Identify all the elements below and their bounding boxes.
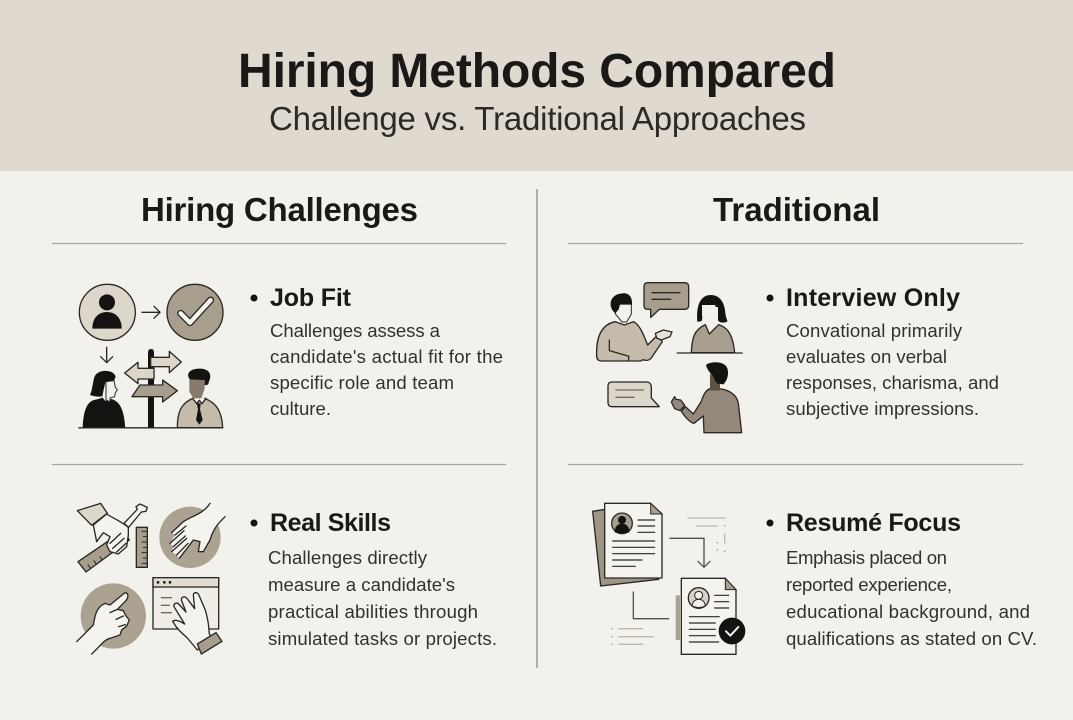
panel: traditional <box>593 191 1037 654</box>
text: interview only: subjective impressions. <box>786 398 979 419</box>
text: interview only: responses, charisma, and <box>786 372 999 393</box>
text: real skills: measure a candidate's <box>268 574 455 595</box>
text: real skills: simulated tasks or projects. <box>268 628 497 649</box>
text: job fit <box>250 284 503 419</box>
text: resumé focus: reported experience, <box>786 574 952 595</box>
icon: resumé focus <box>593 503 745 654</box>
text: real skills <box>250 509 497 649</box>
panel: hiring challenges <box>77 191 503 654</box>
text: job fit: Challenges assess a <box>270 320 441 341</box>
text: job fit: Job Fit <box>270 284 352 312</box>
icon: job fit <box>78 284 223 428</box>
column heading: traditional: Traditional <box>713 191 880 228</box>
text: resumé focus: Emphasis placed on <box>786 547 947 568</box>
text: interview only: Convational primarily <box>786 320 963 341</box>
text: interview only: Interview Only <box>786 284 960 312</box>
text: resumé focus <box>766 509 1037 649</box>
text: real skills: Challenges directly <box>268 547 428 568</box>
icon: interview only <box>597 283 743 433</box>
column heading: hiring challenges: Hiring Challenges <box>141 191 418 228</box>
text: job fit: culture. <box>270 398 331 419</box>
text: resumé focus: Resumé Focus <box>786 509 961 537</box>
header band <box>0 0 1073 171</box>
icon: real skills <box>77 503 225 654</box>
text: resumé focus: educational background, and <box>786 601 1030 622</box>
title: Hiring Methods Compared <box>238 45 836 98</box>
text: interview only <box>766 284 999 419</box>
text: job fit: specific role and team <box>270 372 454 393</box>
text: interview only: evaluates on verbal <box>786 346 947 367</box>
text: real skills: Real Skills <box>270 509 391 537</box>
text: job fit: candidate's actual fit for the <box>270 346 503 367</box>
subtitle: Challenge vs. Traditional Approaches <box>269 100 806 137</box>
text: resumé focus: qualifications as stated on CV. <box>786 628 1037 649</box>
text: real skills: practical abilities through <box>268 601 478 622</box>
